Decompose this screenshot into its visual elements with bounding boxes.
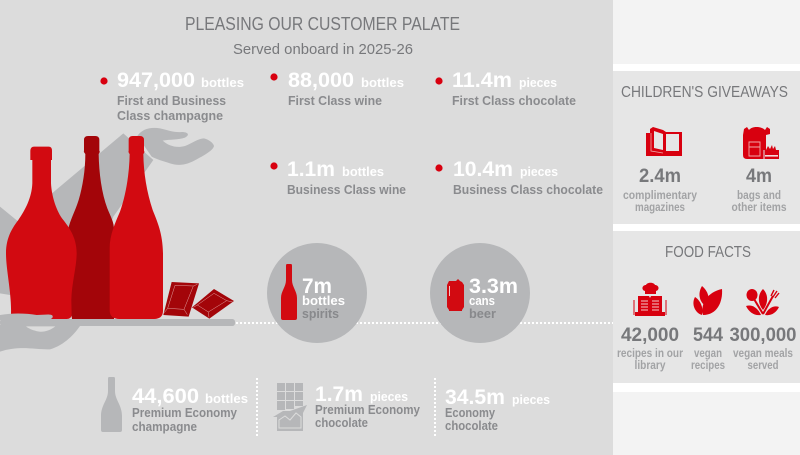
- right bottle: [110, 136, 163, 319]
- stat: business class wine: Business Class wine: [287, 183, 406, 197]
- stat: magazines: 2.4m: [639, 166, 681, 187]
- stat: vegan recipes: vegan: [694, 348, 722, 360]
- stat: economy chocolate: chocolate: [445, 419, 498, 433]
- circle stat: beer: 3.3m: [469, 275, 518, 298]
- stat: premium economy chocolate: chocolate: [315, 416, 368, 430]
- stat: bags: bags and: [737, 190, 781, 202]
- stat: first and business champagne: bottles: [201, 75, 244, 90]
- dark bottle: [68, 136, 114, 319]
- panel: top right blank: [613, 0, 800, 64]
- stat: magazines: [623, 166, 698, 214]
- stat: recipes in library: 42,000: [621, 325, 679, 346]
- stat: first and business champagne: Class champagne: [117, 109, 223, 123]
- stat: magazines: magazines: [635, 202, 685, 214]
- stat: magazines: complimentary: [623, 190, 698, 202]
- stat: bags: other items: [732, 202, 786, 214]
- stat: bags: 4m: [746, 166, 772, 187]
- stat: vegan recipes: 544: [693, 325, 723, 346]
- stat: premium economy chocolate: Premium Economy: [315, 403, 420, 417]
- illustration: waiter with bottles on tray: [0, 128, 235, 352]
- heading: food facts: FOOD FACTS: [665, 244, 751, 261]
- stat: first class chocolate: 11.4m: [452, 69, 512, 92]
- circle stat: spirits: 7m: [302, 275, 332, 298]
- title: PLEASING OUR CUSTOMER PALATE: [185, 14, 460, 34]
- dotted divider two: [434, 378, 436, 436]
- left bottle: [6, 147, 77, 319]
- stat: vegan recipes: [691, 325, 725, 372]
- stat: premium economy chocolate: [273, 383, 420, 431]
- stat: vegan meals: served: [748, 360, 778, 372]
- stat: first class wine: [270, 69, 404, 108]
- stat: first class wine: First Class wine: [288, 94, 382, 108]
- tray: [0, 319, 235, 326]
- stat: vegan meals: vegan meals: [733, 348, 793, 360]
- stat: premium economy champagne: champagne: [132, 420, 197, 434]
- stat: economy chocolate: 34.5m: [445, 386, 505, 409]
- stat: premium economy chocolate: 1.7m: [315, 383, 363, 406]
- circle stat: beer: cans: [469, 293, 495, 308]
- dotted divider one: [256, 378, 258, 436]
- stat: bags: [732, 166, 786, 214]
- stat: first class chocolate: [435, 69, 576, 108]
- dotted tray line: [236, 322, 613, 324]
- upper hand: [137, 128, 214, 165]
- circle stat: spirits: spirits: [302, 306, 339, 321]
- circle stat: beer: beer: [469, 306, 496, 321]
- stat: business class chocolate: 10.4m: [453, 158, 513, 181]
- stat: business class chocolate: Business Class chocolate: [453, 183, 603, 197]
- stat: first class chocolate: First Class chocolate: [452, 94, 576, 108]
- stat: first class wine: bottles: [361, 75, 404, 90]
- stat: vegan recipes: recipes: [691, 360, 725, 372]
- panel: children's giveaways background: [613, 71, 800, 224]
- lower hand: [0, 313, 81, 352]
- circle stat: spirits: [267, 243, 367, 343]
- stat: recipes in library: [617, 325, 683, 372]
- stat: recipes in library: recipes in our: [617, 348, 683, 360]
- panel: bottom right blank: [613, 392, 800, 455]
- stat: business class wine: bottles: [342, 164, 384, 179]
- stat: economy chocolate: pieces: [512, 392, 550, 407]
- circle stat: spirits: bottles: [302, 293, 345, 308]
- waiter arm: [0, 133, 153, 297]
- icon: spoon fork leaves: [746, 289, 779, 315]
- stat: premium economy champagne: 44,600: [132, 385, 199, 408]
- stat: first class chocolate: pieces: [519, 75, 557, 90]
- stat: business class wine: [270, 158, 406, 197]
- circle stat: beer: [430, 243, 530, 343]
- icon: backpack: [743, 127, 779, 159]
- stat: premium economy champagne: Premium Economy: [132, 406, 237, 420]
- stat: economy chocolate: [445, 386, 550, 433]
- panel: main palate panel: [0, 0, 613, 455]
- stat: first and business champagne: [100, 69, 244, 123]
- stat: recipes in library: library: [634, 360, 666, 372]
- icon: leaves: [693, 286, 722, 315]
- stat: business class wine: 1.1m: [287, 158, 335, 181]
- stat: first class wine: 88,000: [288, 69, 354, 92]
- subtitle: Served onboard in 2025-26: [233, 41, 413, 58]
- stat: premium economy champagne: [101, 377, 248, 434]
- stat: premium economy champagne: bottles: [205, 391, 248, 406]
- stat: economy chocolate: Economy: [445, 406, 495, 420]
- stat: first and business champagne: 947,000: [117, 69, 195, 92]
- chocolate piece one: [163, 282, 199, 317]
- stat: premium economy chocolate: pieces: [370, 389, 408, 404]
- stat: business class chocolate: [435, 158, 603, 197]
- stat: business class chocolate: pieces: [520, 164, 558, 179]
- stat: vegan meals: 300,000: [730, 325, 796, 346]
- chocolate piece two: [192, 289, 234, 319]
- icon: chef hat recipe book: [634, 283, 666, 316]
- icon: open book: [646, 127, 682, 156]
- stat: vegan meals: [730, 325, 796, 372]
- panel: food facts background: [613, 231, 800, 383]
- stat: first and business champagne: First and Business: [117, 94, 226, 108]
